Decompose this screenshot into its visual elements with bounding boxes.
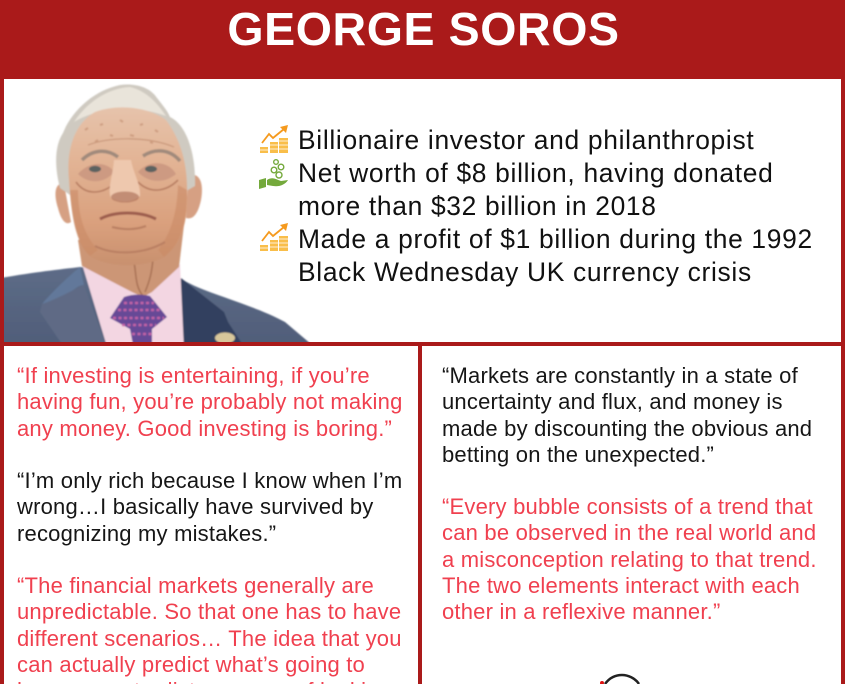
- quote: every bubble: The two elements interact with each: [442, 573, 800, 598]
- quote: uncertainty and flux: made by discounting the obvious and: [442, 416, 812, 441]
- fact lines: Net worth of $8 billion, having donated: [298, 158, 773, 188]
- pin: [215, 332, 235, 344]
- quote: every bubble: [442, 494, 817, 624]
- panel: right quotes: [442, 363, 817, 684]
- fact lines: more than $32 billion in 2018: [298, 191, 657, 221]
- quote: good investing is boring: having fun, you’re probably not making: [17, 389, 402, 414]
- quote: uncertainty and flux: uncertainty and flux, and money is: [442, 389, 783, 414]
- neck: [78, 225, 184, 297]
- quote: knowing when wrong: [17, 468, 402, 546]
- quote: unpredictable markets: can actually predict what’s going to: [17, 652, 365, 677]
- portrait of George Soros: [4, 84, 310, 342]
- quote: good investing is boring: [17, 363, 402, 441]
- face: [68, 107, 187, 265]
- quote: good investing is boring: “If investing is entertaining, if you’re: [17, 363, 370, 388]
- shirt: [82, 264, 184, 350]
- brows and forehead creases: [82, 151, 180, 161]
- quote: knowing when wrong: recognizing my mistakes.”: [17, 521, 276, 546]
- skin shading: [70, 185, 187, 257]
- quote: knowing when wrong: wrong…I basically have survived by: [17, 494, 374, 519]
- quote: every bubble: other in a reflexive manner.”: [442, 599, 720, 624]
- quote: knowing when wrong: “I’m only rich because I know when I’m: [17, 468, 402, 493]
- ears: [56, 184, 71, 223]
- fact lines: Black Wednesday UK currency crisis: [298, 257, 752, 287]
- mouth: [100, 213, 156, 219]
- icon: rising coins second: [260, 223, 288, 251]
- panel: left quotes: [17, 363, 402, 684]
- quote: every bubble: “Every bubble consists of a trend that: [442, 494, 813, 519]
- quote: uncertainty and flux: betting on the unexpected.”: [442, 442, 714, 467]
- fact lines: [298, 125, 813, 287]
- icon: hand with coins: [259, 159, 288, 189]
- fact lines: Billionaire investor and philanthropist: [298, 125, 754, 155]
- quote: unpredictable markets: different scenarios… The idea that you: [17, 626, 402, 651]
- eyes: [78, 164, 114, 181]
- quote: good investing is boring: any money. Good investing is boring.”: [17, 416, 392, 441]
- quote: unpredictable markets: unpredictable. So that one has to have: [17, 599, 401, 624]
- title: GEORGE SOROS: [227, 3, 620, 55]
- quote: every bubble: can be observed in the real world and: [442, 520, 816, 545]
- quote: every bubble: a misconception relating to that trend.: [442, 547, 817, 572]
- quote: uncertainty and flux: “Markets are constantly in a state of: [442, 363, 798, 388]
- quote: unpredictable markets: [17, 573, 402, 684]
- icon: rising coins: [260, 125, 288, 153]
- fact list: [259, 125, 813, 287]
- fact lines: Made a profit of $1 billion during the 1992: [298, 224, 813, 254]
- header band: [0, 0, 845, 79]
- icon: partial circle at bottom: [600, 674, 640, 684]
- nose: [110, 160, 140, 202]
- quote: uncertainty and flux: [442, 363, 812, 467]
- tie: [110, 295, 167, 350]
- quote: unpredictable markets: “The financial markets generally are: [17, 573, 374, 598]
- suit: [0, 267, 318, 370]
- hair: [56, 85, 195, 195]
